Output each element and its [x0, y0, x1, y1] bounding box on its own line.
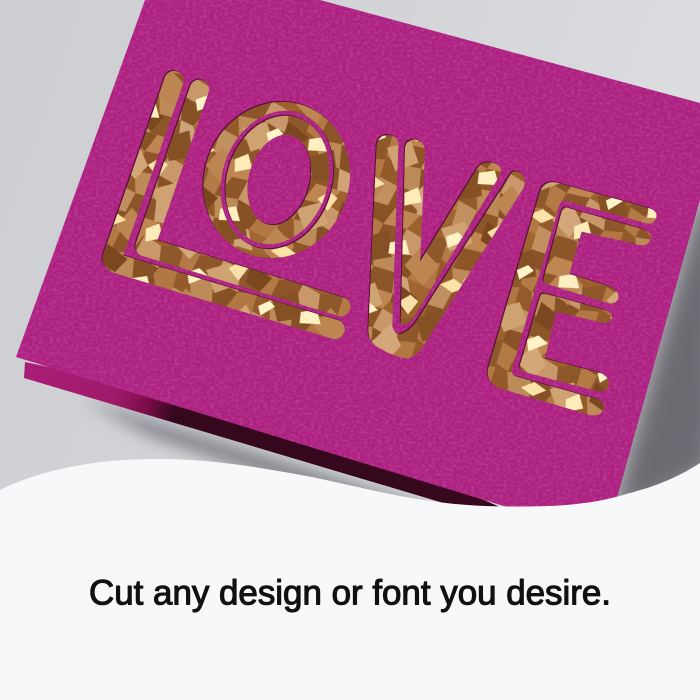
- card back flap: [24, 362, 507, 510]
- card cast shadow: [80, 190, 700, 520]
- cut-out word LOVE: [102, 70, 656, 416]
- white wave panel: [0, 459, 700, 700]
- card front: [16, 0, 700, 507]
- caption: Cut any design or font you desire.: [89, 574, 611, 612]
